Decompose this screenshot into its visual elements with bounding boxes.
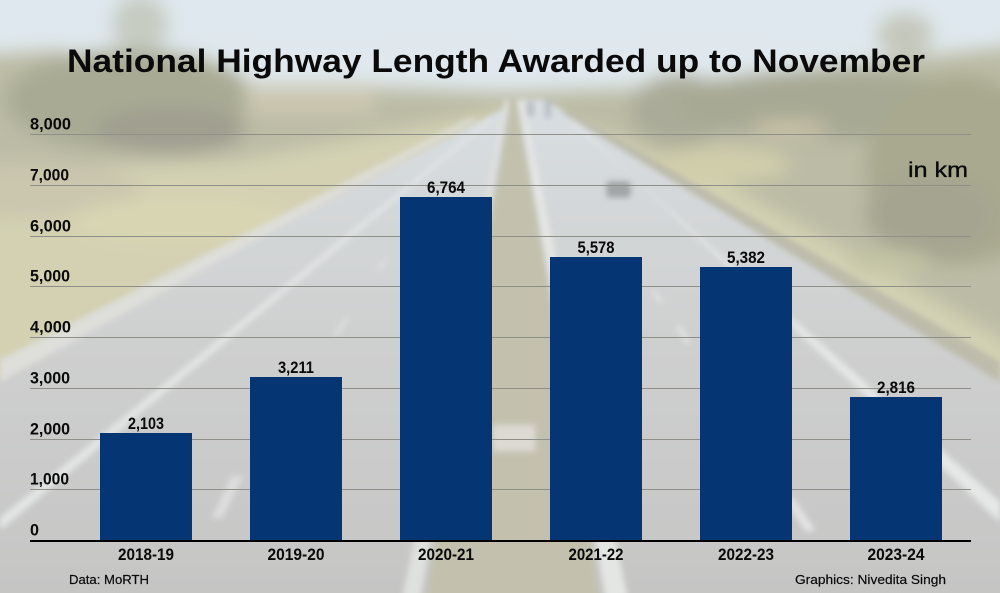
bar: 2023-24 xyxy=(850,379,942,541)
y axis labels: 2,000 xyxy=(30,420,70,438)
x axis labels: 2019-20 xyxy=(268,546,324,564)
y axis labels xyxy=(30,114,71,540)
x axis labels: 2018-19 xyxy=(118,546,174,564)
y axis labels: 5,000 xyxy=(30,266,70,286)
bar: 2022-23 xyxy=(700,249,792,541)
x axis labels: 2022-23 xyxy=(718,546,774,564)
bar chart xyxy=(100,179,942,541)
x axis labels xyxy=(118,546,925,564)
bar: 2019-20 xyxy=(250,359,342,541)
median xyxy=(425,100,600,593)
x axis labels: 2023-24 xyxy=(868,546,925,564)
source credit: Data: MoRTH xyxy=(69,573,149,587)
y axis labels: 3,000 xyxy=(30,368,70,388)
bar: 2020-21: 6,764 xyxy=(427,179,466,197)
y axis labels: 4,000 xyxy=(30,318,71,336)
x axis labels: 2020-21 xyxy=(418,546,474,564)
title: National Highway Length Awarded up to November xyxy=(67,43,925,79)
bar: 2018-19 xyxy=(100,415,192,541)
x axis line xyxy=(30,540,971,542)
unit label: in km xyxy=(908,159,968,182)
y axis labels: 0 xyxy=(30,520,39,540)
lane lines xyxy=(0,120,492,530)
x axis labels: 2021-22 xyxy=(568,546,624,564)
graphics credit: Graphics: Nivedita Singh xyxy=(795,573,946,587)
bar: 2018-19: 2,103 xyxy=(128,415,164,433)
gridlines xyxy=(30,134,971,490)
y axis labels: 8,000 xyxy=(30,114,71,134)
bar: 2021-22 xyxy=(550,239,642,541)
y axis labels: 6,000 xyxy=(30,216,71,236)
y axis labels: 1,000 xyxy=(30,470,69,488)
bar: 2021-22: 5,578 xyxy=(578,239,614,257)
bar: 2020-21 xyxy=(400,179,492,541)
bar: 2023-24: 2,816 xyxy=(877,379,915,397)
y axis labels: 7,000 xyxy=(30,166,69,184)
bar: 2022-23: 5,382 xyxy=(727,249,765,267)
bar: 2019-20: 3,211 xyxy=(278,359,314,377)
barriers xyxy=(0,118,478,382)
car xyxy=(606,181,631,198)
